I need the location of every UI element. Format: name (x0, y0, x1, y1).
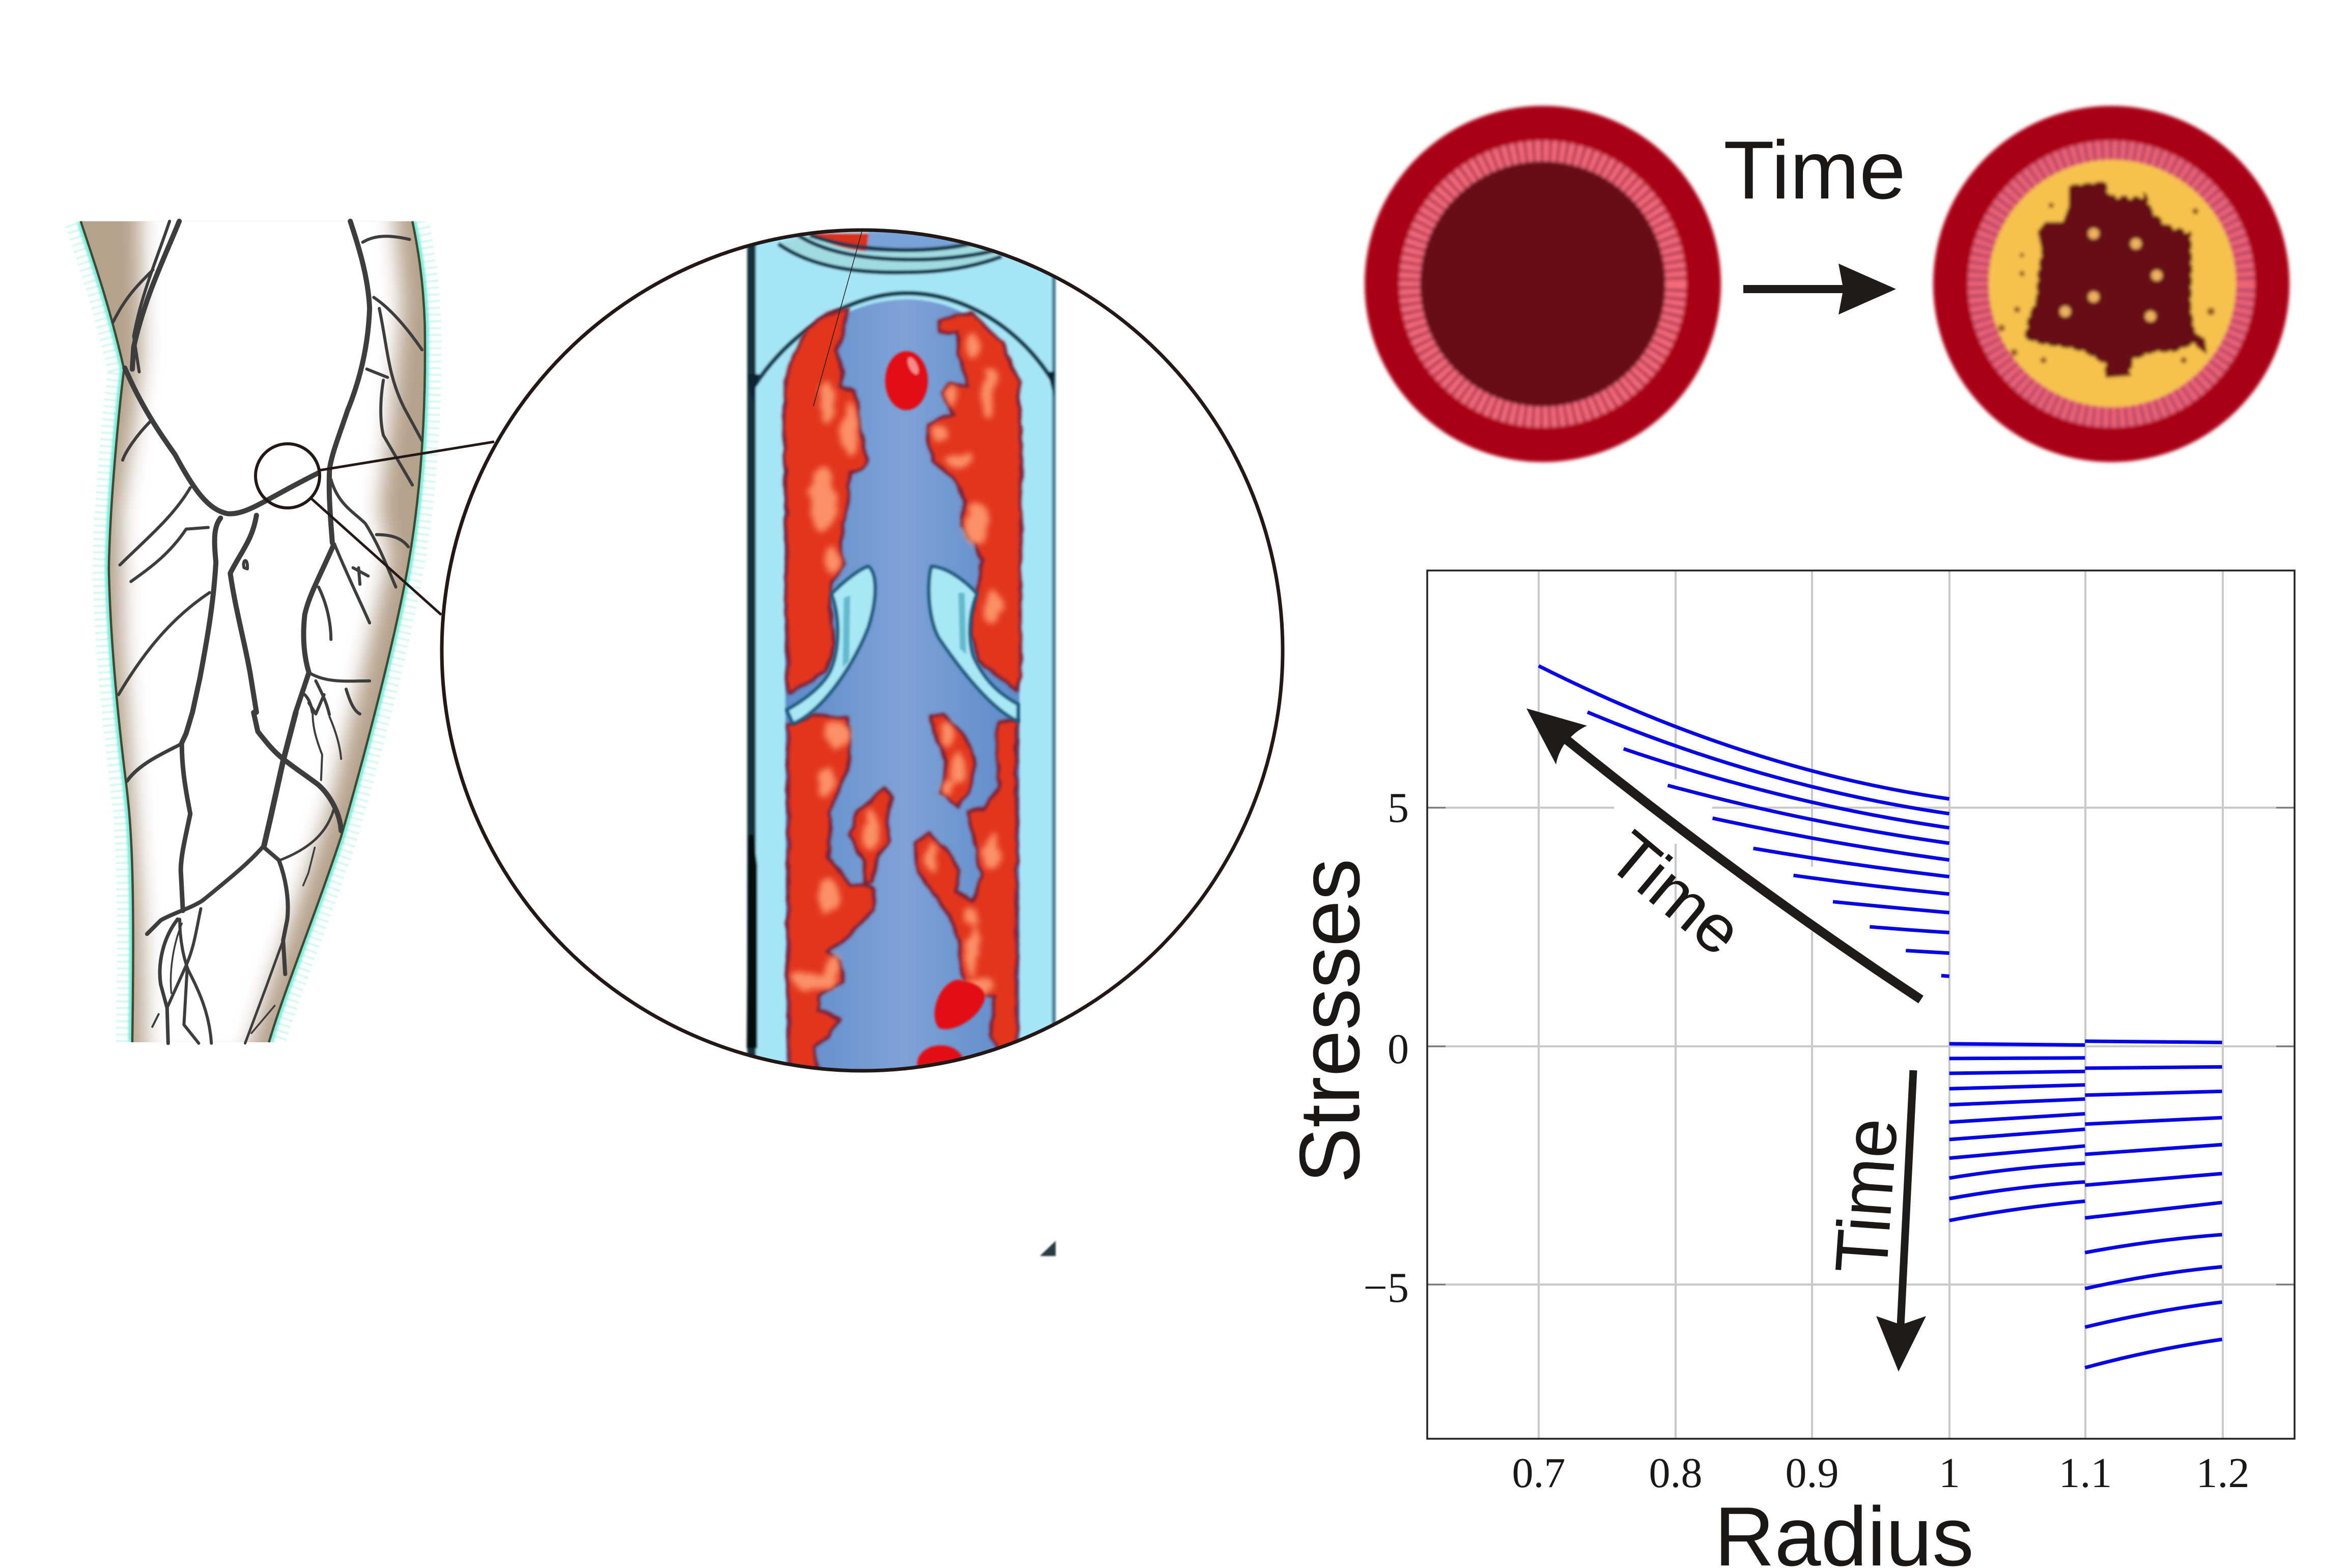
leg outline (81, 221, 425, 1042)
blood lumen (784, 299, 1020, 1079)
panel: diseased artery cross-section (1933, 106, 2289, 462)
outer wall (1933, 106, 2289, 462)
y tick labels (1364, 784, 1409, 1312)
right wall (1052, 224, 1056, 1079)
dark specks (1998, 203, 2215, 363)
sheath fill (753, 224, 1054, 1079)
left wall (747, 224, 756, 1079)
left wall thickened section (747, 835, 757, 1048)
valve shading (843, 593, 966, 667)
upper segment: blood (867, 232, 982, 252)
plaque edge bumps (2024, 180, 2196, 377)
x tick labels: 0.8 (1649, 1449, 1702, 1497)
plaque flecks (2060, 228, 2162, 322)
blood cells (885, 351, 985, 1082)
panel: magnified vessel (747, 224, 1056, 1082)
x tick labels: 0.9 (1786, 1449, 1838, 1497)
arrow: time along inner layer (1526, 708, 1921, 1000)
y axis title: Stresses (1282, 859, 1377, 1183)
plaque (1989, 160, 2236, 407)
vessel sheath and walls (747, 224, 1056, 1079)
x tick labels: 1.1 (2058, 1449, 2112, 1497)
label: Time along outer arrow: Time (1819, 1116, 1913, 1276)
chart: stress versus radius (1282, 571, 2295, 1568)
lumen (1420, 161, 1665, 407)
blue curves: middle layer (1949, 1044, 2085, 1220)
upper segment: red deposit (810, 233, 869, 251)
upper left plaque (784, 309, 867, 693)
lower right plaque (915, 719, 1016, 1079)
ring stripes (1410, 151, 1676, 417)
label: Time (top): Time (1723, 124, 1906, 216)
x tick labels: 1.2 (2196, 1449, 2250, 1497)
heart-shaped deposit (850, 789, 891, 883)
lumen arc (755, 293, 1053, 385)
plot frame (1427, 571, 2295, 1439)
grid lines (1427, 571, 2295, 1439)
callout: small circle on leg (256, 444, 320, 508)
panel: healthy artery cross-section (1365, 106, 1721, 462)
callout lines to zoom circle (312, 442, 494, 615)
upper segment arcs (778, 234, 1002, 272)
blue curves: outer layer (2085, 1041, 2222, 1367)
leg edge glow (81, 221, 425, 1042)
lower left plaque (788, 715, 873, 1079)
upper right plaque (928, 313, 1021, 691)
outer wall (1365, 106, 1721, 462)
plaque highlights (790, 332, 1002, 997)
left valve leaflet (787, 566, 875, 724)
arrow: time along outer layers (1876, 1070, 1926, 1372)
x tick labels (1512, 1449, 2250, 1497)
zoom circle outline (442, 230, 1283, 1071)
cell highlight (906, 356, 921, 376)
arteries: lower leg (127, 712, 341, 1043)
pink ring (1978, 151, 2244, 417)
ring stripes (1978, 151, 2244, 417)
axis ticks (1427, 808, 2295, 1285)
lower right blob (932, 715, 976, 808)
x tick labels: 0.7 (1512, 1449, 1566, 1497)
leg body shading (80, 221, 424, 1042)
pink ring (1410, 151, 1676, 417)
arrow: healthy to diseased (1743, 264, 1896, 315)
y tick labels: 5 (1388, 784, 1409, 832)
valves (787, 566, 1018, 724)
blue curves: inner layer (1539, 666, 1949, 976)
hairline (813, 230, 862, 406)
y tick labels: 0 (1388, 1025, 1409, 1073)
label: Time along inner arrow: Time (1595, 817, 1757, 970)
arc end marks (747, 372, 1055, 402)
x tick labels: 1 (1939, 1449, 1960, 1497)
y tick labels: −5 (1364, 1264, 1409, 1312)
narrowed lumen (1998, 180, 2215, 378)
upper segment: teal band (778, 235, 1002, 272)
arteries: upper leg (113, 221, 422, 715)
plaques (784, 309, 1021, 1079)
small artifact (1040, 1241, 1056, 1256)
illustration: leg with arterial tree (65, 219, 442, 1045)
right valve leaflet (929, 566, 1018, 721)
